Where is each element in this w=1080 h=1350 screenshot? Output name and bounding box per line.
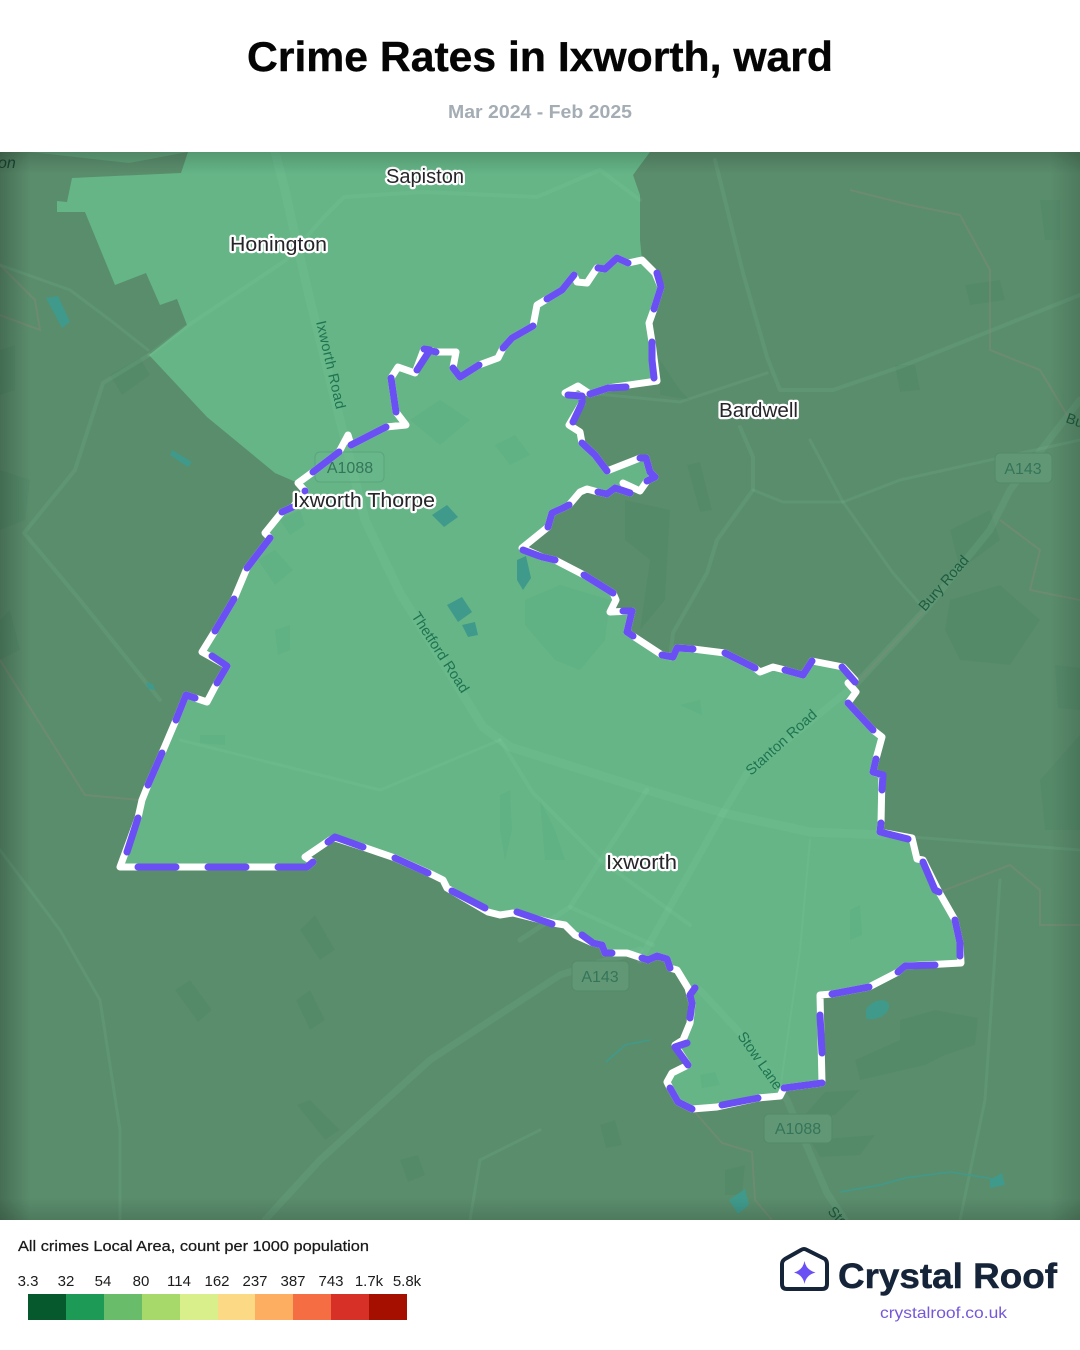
road shields xyxy=(315,452,1052,1143)
icon: house outline with star xyxy=(782,1249,827,1289)
place label: Ixworth: Ixworth xyxy=(606,852,677,874)
map edge vignette xyxy=(0,152,1080,1220)
road shield: A143 east xyxy=(995,453,1052,483)
subtitle: date range: Mar 2024 - Feb 2025 xyxy=(448,102,632,122)
legend title: All crimes Local Area, count per 1000 population xyxy=(18,1238,369,1255)
place label: Ixworth Thorpe: Ixworth Thorpe xyxy=(293,490,435,512)
road label: Ixworth Road: Ixworth Road xyxy=(312,319,348,411)
legend xyxy=(18,1238,422,1320)
roads xyxy=(111,352,1049,1192)
place label: Sapiston: Sapiston xyxy=(386,166,464,188)
road shield: A143 south xyxy=(572,961,629,991)
legend scale values: 162 xyxy=(204,1273,230,1290)
map base: surrounding lower-rate area xyxy=(0,152,1080,1220)
water bodies xyxy=(46,296,1005,1214)
legend scale values: 114 xyxy=(167,1273,191,1290)
road label: Stanton Road: Stanton Road xyxy=(743,707,821,779)
legend scale values: 3.3 xyxy=(18,1273,38,1290)
legend scale values: 32 xyxy=(58,1273,74,1290)
legend scale values: 387 xyxy=(280,1273,306,1290)
road shield: A1088 north: A1088 xyxy=(327,460,373,477)
ward boundary: white base line xyxy=(120,258,961,1109)
road shield: A143 south: A143 xyxy=(581,969,619,986)
ward boundary: purple dashes xyxy=(127,258,960,1109)
place label: Honington: Honington xyxy=(230,234,327,256)
place labels xyxy=(230,166,798,874)
road label: Bury Road: Bury Road xyxy=(916,553,973,615)
logo: Crystal Roof xyxy=(782,1249,1057,1322)
legend scale values: 1.7k xyxy=(355,1273,384,1290)
fields and woodland patches xyxy=(0,200,1080,1195)
road shield: A1088 south: A1088 xyxy=(775,1121,821,1138)
legend scale values: 80 xyxy=(133,1273,149,1290)
fields inside ward xyxy=(200,400,862,1088)
shaded area: northern neighbouring ward xyxy=(57,152,650,483)
road shield: A143 east: A143 xyxy=(1004,461,1042,478)
lighter band at top left xyxy=(30,152,188,163)
shaded area: Ixworth ward xyxy=(120,258,961,1109)
legend scale values: 237 xyxy=(242,1273,268,1290)
road label: Thetford Road: Thetford Road xyxy=(408,609,472,696)
legend scale values xyxy=(18,1273,422,1290)
road label: Stow Lane: Stow Lane xyxy=(734,1029,785,1093)
title: Crime Rates in Ixworth, ward xyxy=(247,33,833,80)
parish boundary lines xyxy=(0,190,1080,1220)
road shield: A1088 south xyxy=(764,1114,832,1143)
legend colour bar xyxy=(28,1294,407,1320)
logo wordmark: Crystal Roof xyxy=(838,1257,1057,1296)
road shield: A1088 north xyxy=(315,452,384,482)
legend scale values: 5.8k xyxy=(393,1273,422,1290)
place label: Bardwell: Bardwell xyxy=(719,400,798,422)
road label: Stow: Stow xyxy=(824,1204,858,1239)
stream xyxy=(606,1040,1000,1192)
website link: crystalroof.co.uk xyxy=(880,1305,1008,1322)
legend scale values: 743 xyxy=(318,1273,344,1290)
legend scale values: 54 xyxy=(95,1273,111,1290)
